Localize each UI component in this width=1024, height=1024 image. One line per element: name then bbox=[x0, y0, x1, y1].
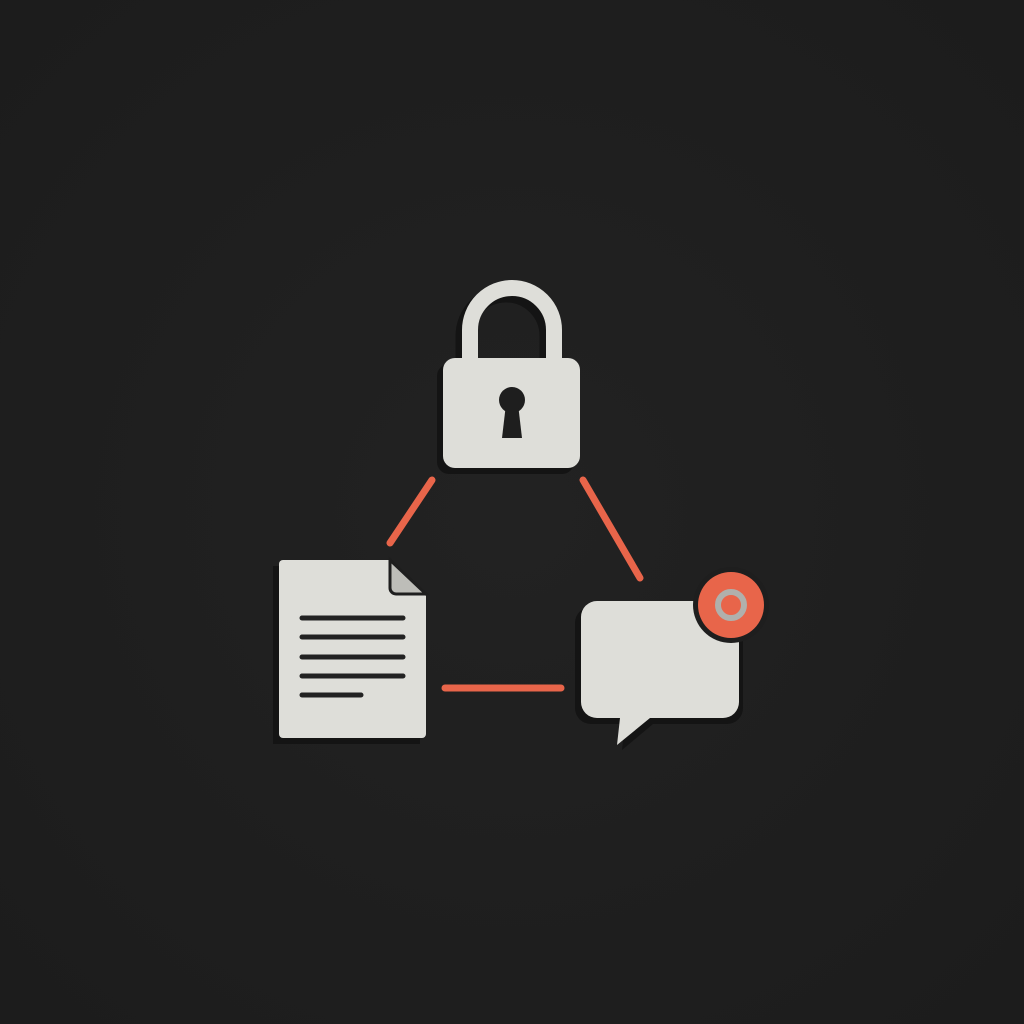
notification badge bbox=[693, 567, 769, 643]
icon: padlock bbox=[437, 288, 580, 474]
connector lines bbox=[390, 480, 640, 688]
icon: document bbox=[273, 560, 426, 744]
icon: chat bubble with notification bbox=[575, 567, 769, 750]
